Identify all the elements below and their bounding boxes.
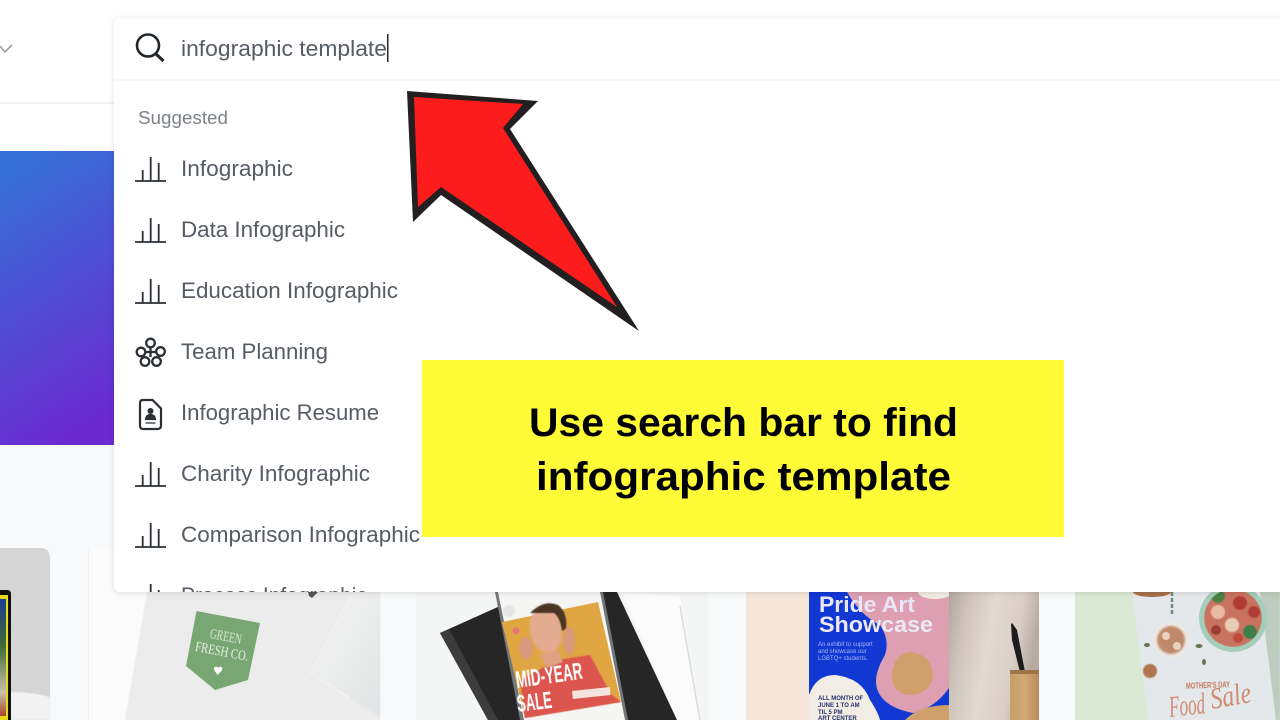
suggestion: Data Infographic: Data Infographic: [181, 217, 345, 242]
callout text: infographic template: [536, 455, 951, 499]
callout text: Use search bar to find: [529, 401, 958, 445]
poster: [809, 585, 952, 720]
poster script title: [1167, 676, 1254, 720]
suggestion: Education Infographic: Education Infographic: [181, 278, 398, 303]
sale poster: MID-YEAR: [514, 658, 584, 694]
suggestion: Infographic: [135, 156, 293, 181]
poster: LGBTQ+ students.: [818, 656, 868, 662]
suggestion: Charity Infographic: Charity Infographic: [181, 461, 370, 486]
suggestion list: [135, 156, 420, 608]
suggestion: Process Infographic (clipped): Process Infographic: [181, 583, 367, 608]
poster: ALL MONTH OF: [818, 696, 864, 702]
poster: JUNE 1 TO AM: [818, 703, 860, 709]
icon: dropdown chevron: [0, 45, 12, 52]
nut bowl: [1153, 622, 1189, 658]
phone: [495, 592, 628, 720]
suggestion: Infographic Resume: Infographic Resume: [181, 400, 379, 425]
green badge: [186, 611, 260, 690]
callout: yellow box: [422, 360, 1064, 537]
suggestion: Infographic: Infographic: [181, 156, 293, 181]
black notebook: [440, 592, 677, 720]
poster: An exhibit to support: [818, 642, 873, 648]
pencil holder: [1010, 670, 1039, 720]
poster: TIL 5 PM: [818, 710, 843, 716]
text cursor: [387, 34, 388, 62]
callout text: [529, 401, 958, 499]
salad bowl: [1199, 592, 1267, 652]
green badge: FRESH CO.: [194, 639, 250, 665]
template card: yellow phone mockup: [0, 548, 50, 720]
heading: Suggested: Suggested: [138, 108, 228, 128]
suggestion: Team Planning: Team Planning: [181, 339, 328, 364]
poster: and showcase our: [818, 649, 867, 655]
gradient banner: [0, 151, 114, 445]
pen: [1011, 623, 1025, 672]
poster: Pride Art: [819, 592, 916, 617]
top navigation bar: [0, 0, 114, 104]
suggestion: Process Infographic (clipped): [150, 584, 365, 592]
suggestion: Comparison Infographic: Comparison Infographic: [181, 522, 420, 547]
search input text: infographic template: [181, 36, 387, 61]
poster: Showcase: [819, 612, 933, 637]
poster script title: Sale: [1207, 676, 1254, 716]
template card: Pride Art Showcase poster: [746, 585, 1039, 720]
template card: green logo mockup: [88, 549, 380, 720]
sale poster: [502, 602, 621, 718]
red arrow pointing to search bar: [407, 91, 639, 331]
template card: food sale poster: [1075, 584, 1280, 720]
search dropdown panel: [114, 18, 1280, 608]
green badge: GREEN: [209, 626, 243, 648]
poster caption: MOTHER'S DAY: [1186, 680, 1231, 691]
sale poster: SALE: [515, 687, 553, 718]
template card: mid-year sale phone mockup: [416, 592, 708, 720]
icon: magnifier: [137, 34, 164, 61]
